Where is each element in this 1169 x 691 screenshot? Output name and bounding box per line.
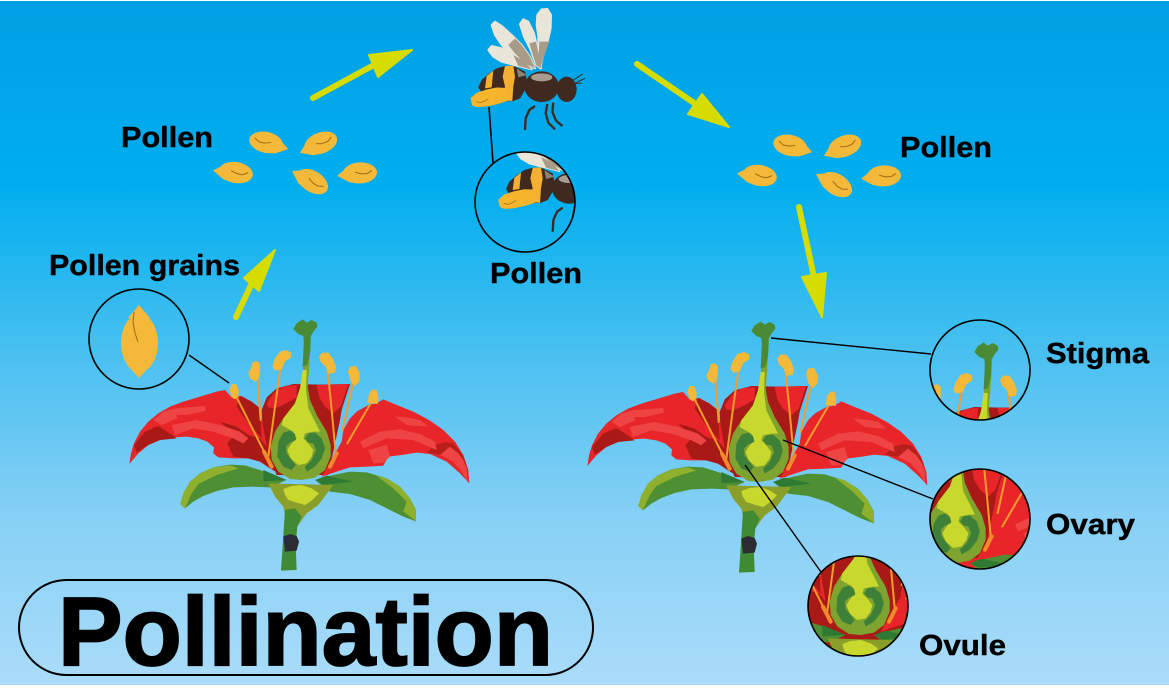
label: Stigma: Stigma <box>1046 338 1150 370</box>
label: Pollen center: Pollen <box>490 258 582 290</box>
connector line: stigma <box>771 338 931 354</box>
bee pollen basket <box>471 88 509 107</box>
pollen seeds: right group <box>735 130 901 203</box>
label: Ovule: Ovule <box>919 630 1006 662</box>
label: Pollen grains: Pollen grains <box>49 250 240 282</box>
bee thorax and head <box>524 71 585 102</box>
connector line: bee to inset <box>489 107 493 163</box>
stigma <box>293 319 317 343</box>
arrow: bee to pollen <box>637 64 729 127</box>
arrow: pollen to bee <box>313 50 412 98</box>
pistil <box>271 319 331 480</box>
connector line: ovule <box>745 465 821 572</box>
receptacle <box>268 483 333 527</box>
connector line: ovary <box>783 440 933 499</box>
stem <box>281 508 302 571</box>
title: Pollination <box>58 577 553 686</box>
flower: left <box>129 319 469 571</box>
bee wings <box>488 9 551 69</box>
label: Pollen right: Pollen <box>900 132 992 164</box>
left petal <box>129 390 283 476</box>
back petal <box>262 384 350 475</box>
label: Ovary: Ovary <box>1046 509 1135 541</box>
inset: ovary <box>929 468 1031 570</box>
bee abdomen <box>478 66 527 102</box>
flower head <box>129 319 469 527</box>
connector line: pollen grain <box>189 355 229 383</box>
inset: ovule <box>807 555 909 657</box>
stamens <box>229 350 378 467</box>
bee <box>471 9 585 130</box>
ovules <box>277 431 296 470</box>
inset: stigma <box>929 319 1031 421</box>
arrow: flower to pollen <box>236 250 275 317</box>
inset: bee pollen <box>474 151 576 253</box>
pollen seeds: left group <box>211 127 377 200</box>
label: Pollen left: Pollen <box>121 122 213 154</box>
flower: right <box>587 321 927 573</box>
right petal <box>322 399 469 483</box>
stem mark <box>283 534 299 552</box>
bee legs <box>525 103 562 130</box>
inset: pollen grain <box>89 289 189 389</box>
sepals <box>180 465 287 508</box>
arrow: pollen to stigma <box>799 207 826 317</box>
